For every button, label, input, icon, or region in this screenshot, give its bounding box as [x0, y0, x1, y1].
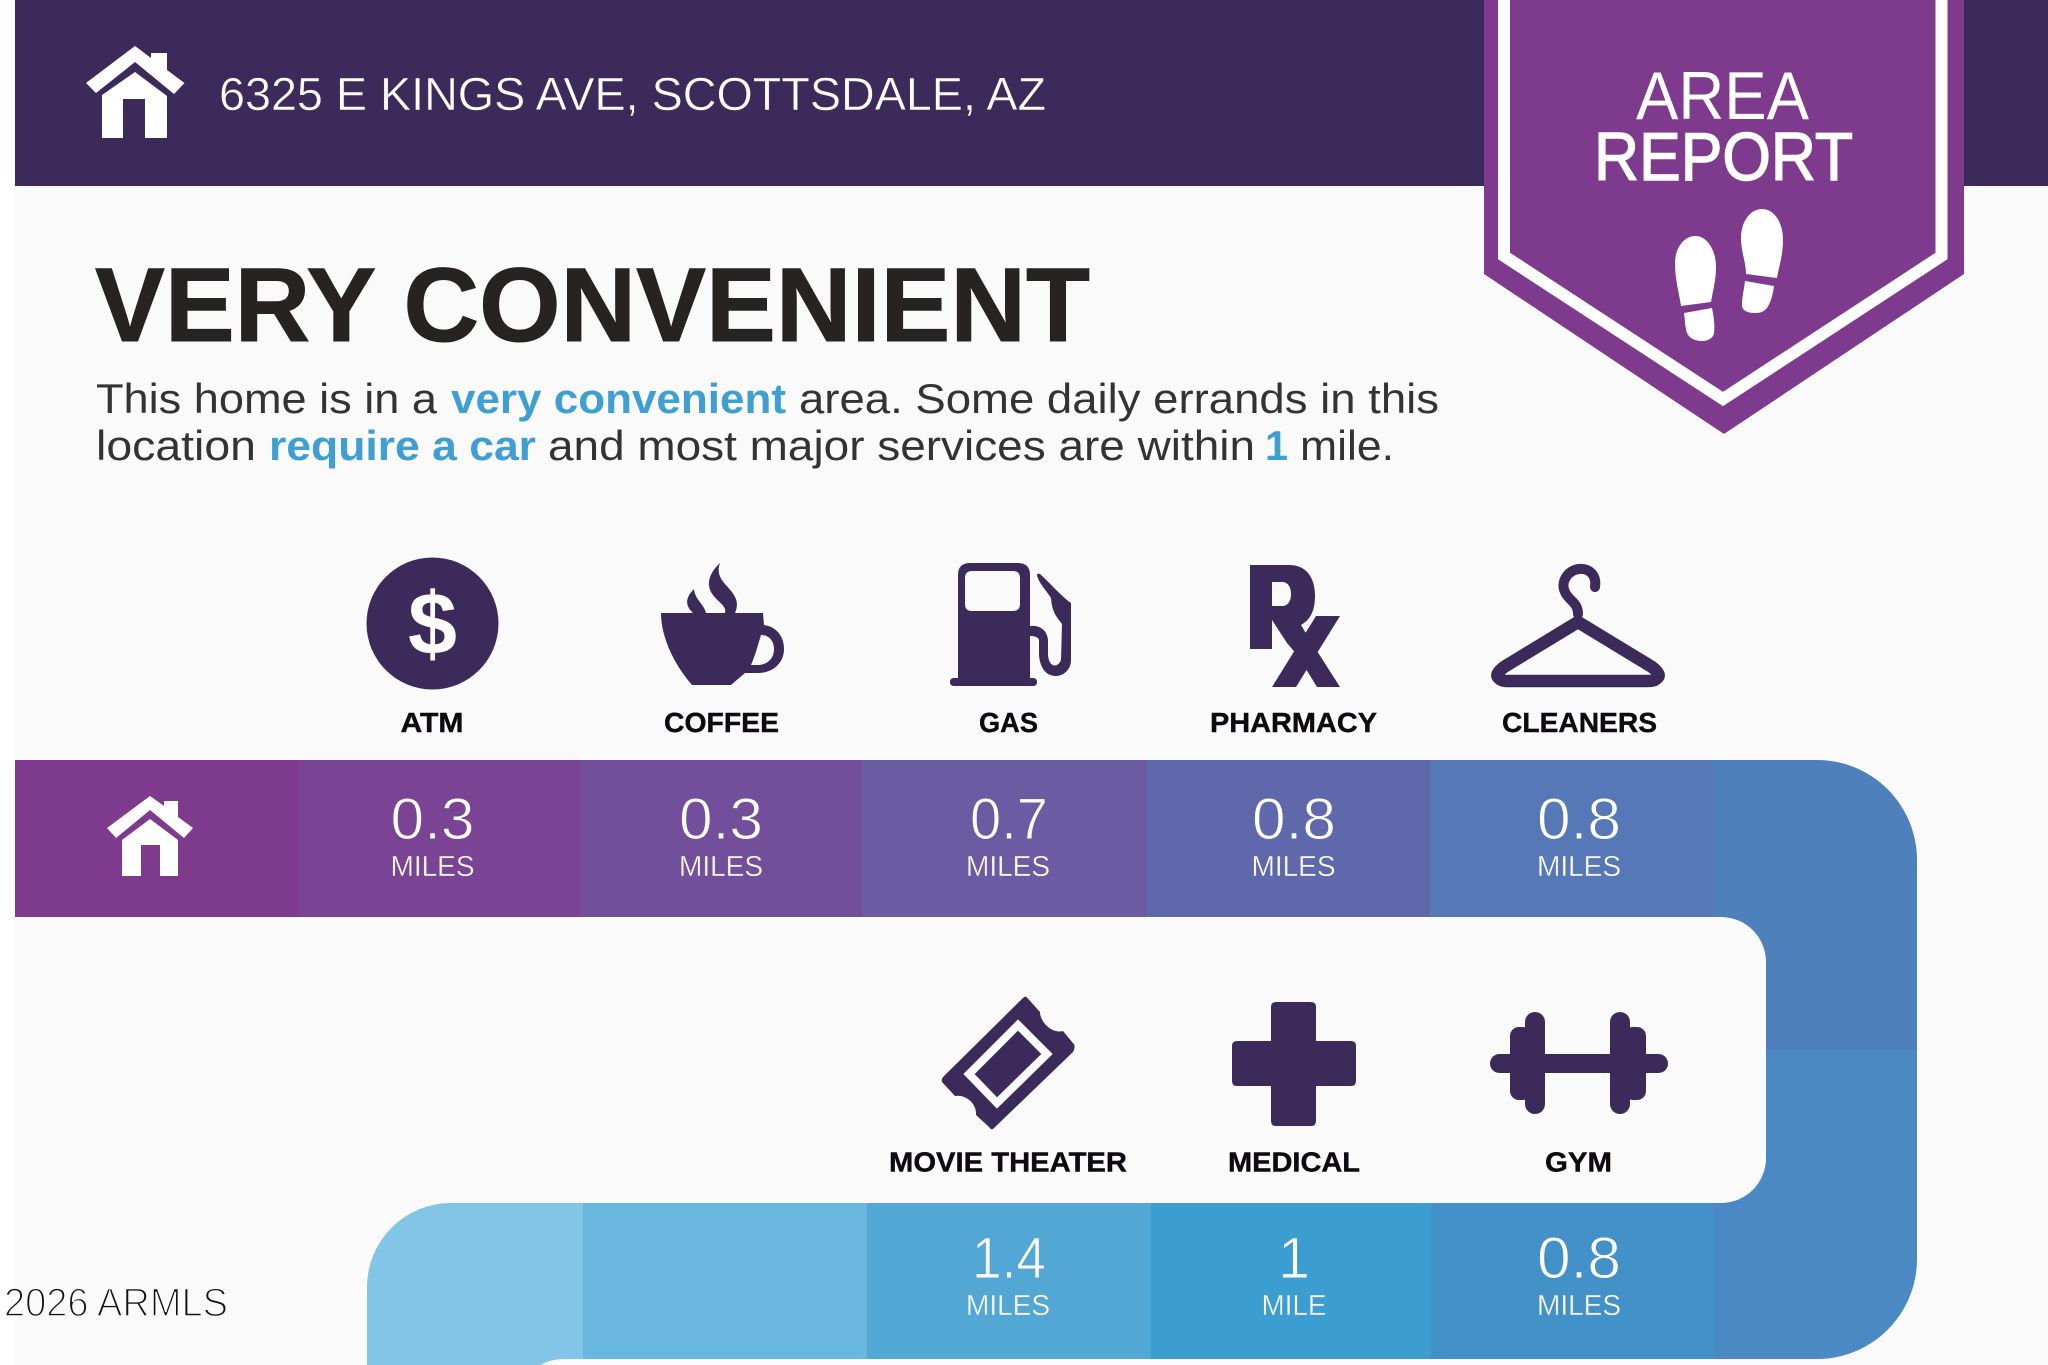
description text: mile. — [1300, 422, 1394, 469]
label: gym: GYM — [1545, 1146, 1612, 1178]
label: cleaners: CLEANERS — [1502, 707, 1657, 738]
description text: require a car — [269, 422, 536, 469]
address text: 6325 E KINGS AVE, SCOTTSDALE, AZ — [219, 68, 1046, 120]
cell: cleaners distance: 0.8 — [1537, 787, 1621, 852]
cell: gas distance — [862, 760, 1147, 917]
description text — [96, 375, 1439, 469]
title: VERY CONVENIENT — [95, 247, 1090, 364]
icon: medical cross — [1232, 1002, 1356, 1126]
label: coffee: COFFEE — [664, 707, 779, 738]
cell: coffee distance — [580, 760, 862, 917]
cell: movie theater distance: 1.4 — [972, 1226, 1046, 1291]
watermark: 2026 ARMLS — [4, 1281, 228, 1325]
cell: coffee distance: 0.3 — [679, 787, 763, 852]
cell: movie theater distance: MILES — [966, 1290, 1050, 1322]
icon: atm: $ — [408, 574, 457, 673]
description text: area. Some daily errands in this — [799, 375, 1439, 422]
label: medical: MEDICAL — [1228, 1146, 1360, 1178]
header band — [15, 0, 2048, 186]
cell: pharmacy distance — [1147, 760, 1430, 917]
icon: house — [86, 46, 184, 138]
cell: gym distance: MILES — [1537, 1290, 1621, 1322]
description text: location — [96, 422, 256, 469]
cell: cleaners distance: MILES — [1537, 851, 1621, 883]
route: right curve — [1713, 760, 1917, 1359]
cell: pharmacy distance: MILES — [1252, 851, 1336, 883]
cell: medical distance: MILE — [1262, 1290, 1326, 1322]
icon: home — [107, 796, 193, 876]
icon: gas pump — [950, 563, 1071, 686]
icon: movie ticket — [942, 997, 1075, 1129]
banner text: report: REPORT — [1594, 119, 1853, 195]
cell: gym distance — [1431, 1203, 1714, 1359]
cell: pharmacy distance: 0.8 — [1252, 787, 1336, 852]
cell: cleaners distance — [1430, 760, 1713, 917]
cell: coffee distance: MILES — [679, 851, 763, 883]
cell: movie theater distance — [867, 1203, 1151, 1359]
icon: atm — [366, 558, 498, 690]
cell: medical distance — [1151, 1203, 1431, 1359]
cell: medical distance: 1 — [1278, 1226, 1310, 1291]
cell: gas distance: MILES — [966, 851, 1050, 883]
description text: This home is in a — [96, 375, 438, 422]
banner text: area: AREA — [1636, 58, 1810, 134]
cell: gas distance: 0.7 — [970, 787, 1048, 852]
left curve — [367, 1203, 583, 1365]
cell: atm distance: MILES — [390, 851, 474, 883]
icon: footprints — [1675, 209, 1783, 341]
label: gas: GAS — [979, 707, 1038, 738]
description text: 1 — [1265, 422, 1288, 469]
home cell — [15, 760, 298, 917]
description text: very convenient — [451, 375, 786, 422]
cell: gym distance: 0.8 — [1537, 1226, 1621, 1291]
route: top row — [15, 760, 1713, 917]
icon: cleaners hanger — [1497, 569, 1659, 681]
description text: and most major services are within — [548, 422, 1255, 469]
label: movie theater: MOVIE THEATER — [889, 1146, 1127, 1178]
icon: gym dumbbell — [1490, 1012, 1668, 1114]
icon: coffee — [661, 563, 784, 685]
route: bottom row — [367, 1203, 1714, 1365]
label: pharmacy: PHARMACY — [1210, 707, 1377, 738]
empty cell — [583, 1203, 867, 1359]
cell: atm distance — [298, 760, 580, 917]
banner: area report — [1484, 0, 1964, 434]
cell: atm distance: 0.3 — [390, 787, 474, 852]
label: atm: ATM — [400, 707, 464, 738]
icon: pharmacy rx — [1250, 565, 1340, 687]
